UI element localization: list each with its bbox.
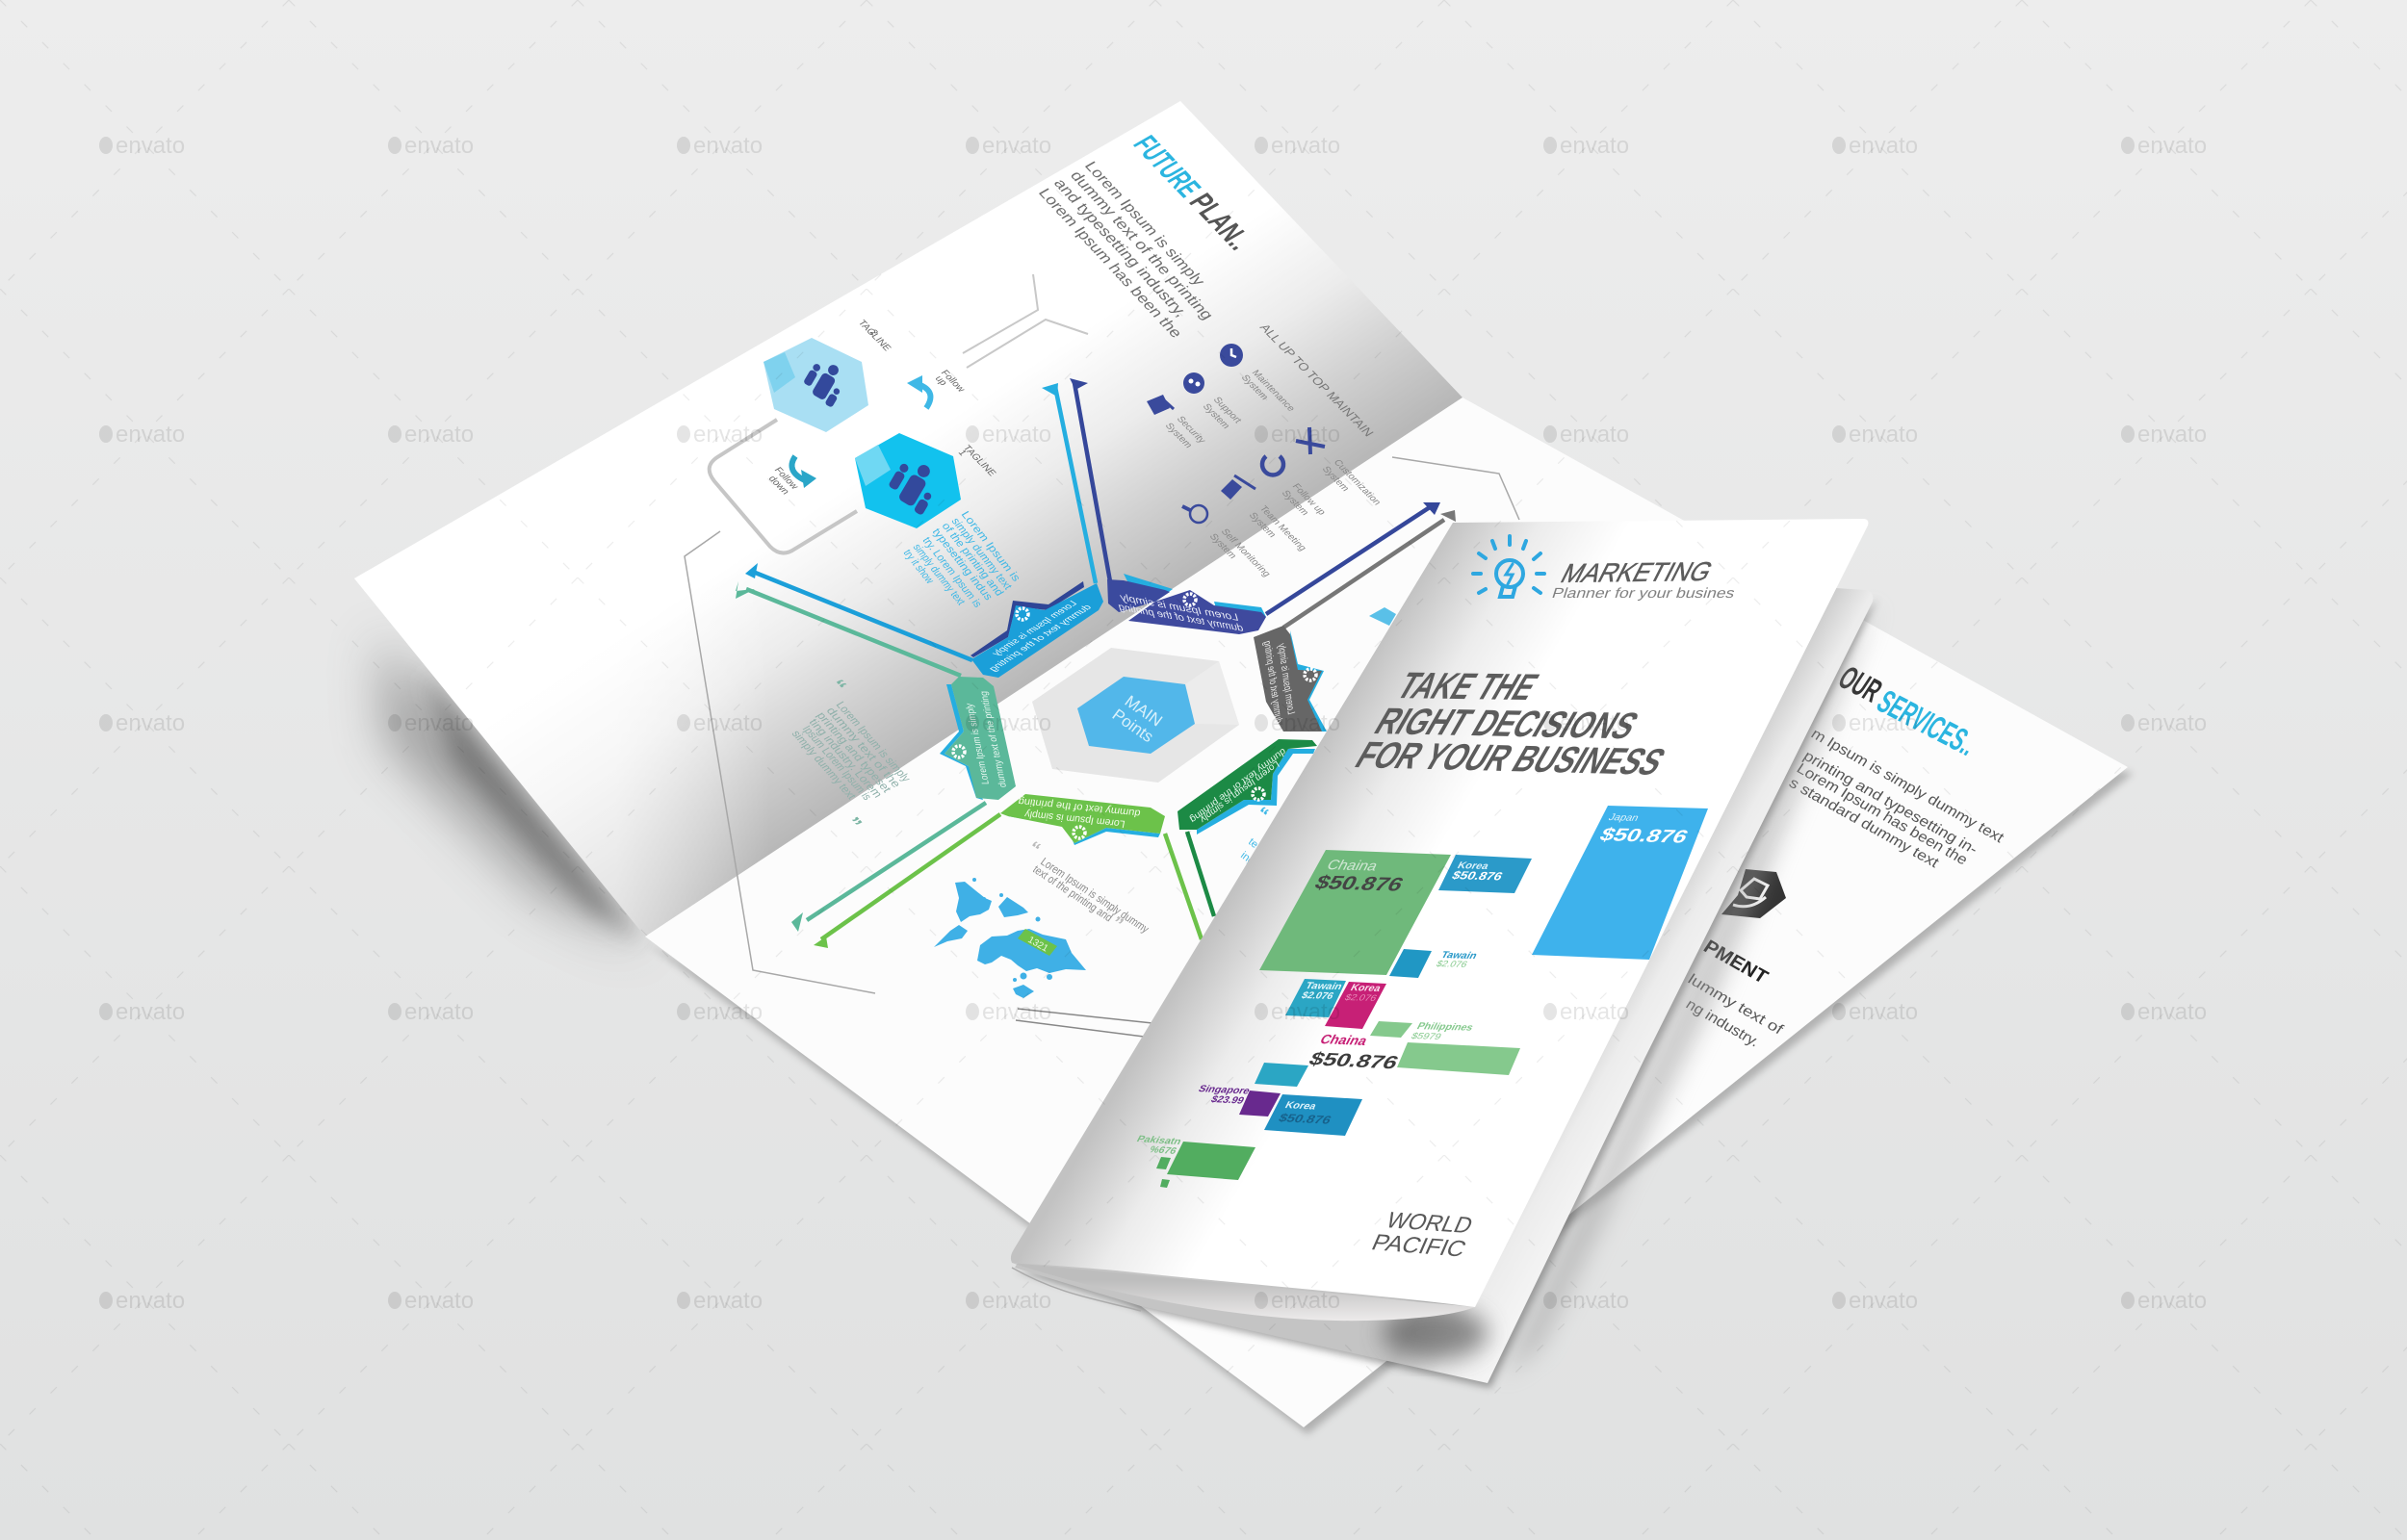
watermarks xyxy=(116,133,2207,1314)
block: korea blue: $50.876 xyxy=(1277,1111,1333,1126)
text block: teal quote: dummy text of the xyxy=(823,705,904,790)
text block: future plan intro xyxy=(1035,159,1216,341)
icon labels: System xyxy=(1200,402,1231,430)
icon: power xyxy=(1262,456,1283,475)
watermarks: envato xyxy=(693,422,763,448)
tagline labels: Follow xyxy=(938,369,968,395)
block: philippines: Philippines xyxy=(1415,1021,1475,1033)
title: our services xyxy=(1832,659,1983,762)
text block: map quote xyxy=(1023,837,1152,936)
tagline labels: down xyxy=(765,475,791,497)
watermarks: envato xyxy=(404,133,474,159)
icon labels: System xyxy=(1319,465,1351,493)
tab text xyxy=(1261,639,1297,725)
block: tawain xyxy=(1285,979,1346,1017)
small blue shape near cover xyxy=(1369,607,1396,626)
hexagon label: MAIN xyxy=(1122,692,1166,730)
icon: follow down arrow xyxy=(791,456,816,488)
block: chaina: $50.876 xyxy=(1311,871,1408,895)
icon labels: Maintenance xyxy=(1249,369,1297,414)
icon: support xyxy=(1183,372,1204,394)
arrow: cyan left xyxy=(745,563,972,660)
tab text: dummy text of the printing xyxy=(1261,639,1284,725)
brand name xyxy=(1550,556,1737,602)
block: korea pink: $2.076 xyxy=(1343,993,1379,1004)
tab text: Lorem Ipsum is simply xyxy=(990,600,1080,658)
upper panel xyxy=(354,101,1462,937)
block: philippines xyxy=(1370,1021,1475,1042)
watermarks: envato xyxy=(1271,999,1340,1025)
watermarks: envato xyxy=(982,1288,1051,1314)
block: japan: $50.876 xyxy=(1596,825,1692,847)
text block: map quote: text of the printing and xyxy=(1030,862,1115,924)
icon labels: Support xyxy=(1210,396,1244,425)
watermarks: envato xyxy=(1271,422,1340,448)
icon labels: System xyxy=(1279,489,1310,517)
map label xyxy=(1018,929,1057,956)
block: korea blue: Korea xyxy=(1283,1100,1319,1112)
watermarks: envato xyxy=(116,422,185,448)
watermarks: envato xyxy=(404,999,474,1025)
text block: blue paragraph: simply dummy text xyxy=(948,517,1014,592)
follow down box xyxy=(710,420,857,553)
watermarks: envato xyxy=(982,133,1051,159)
line: green right xyxy=(1165,834,1202,939)
icon labels: Customization xyxy=(1331,458,1383,507)
headline: FOR YOUR BUSINESS xyxy=(1348,734,1672,783)
fragment: blue quote behind cover: “ xyxy=(1252,803,1272,826)
text block: blue paragraph: try it show xyxy=(900,549,936,586)
center hexagon xyxy=(1032,648,1239,783)
block: chaina wide xyxy=(1306,1032,1520,1075)
block: tawain: $2.076 xyxy=(1300,990,1335,1002)
watermarks: envato xyxy=(1849,1288,1918,1314)
watermarks: envato xyxy=(116,1288,185,1314)
watermarks: envato xyxy=(404,710,474,736)
watermarks: envato xyxy=(1271,710,1340,736)
fragment: blue quote behind cover xyxy=(1238,803,1272,867)
footer: world pacific xyxy=(1368,1208,1477,1262)
arrow: navy right xyxy=(1266,502,1440,614)
block: korea pink: Korea xyxy=(1349,983,1384,994)
text block: teal quote xyxy=(789,676,914,834)
text block: future plan intro: dummy text of the printing xyxy=(1067,168,1216,322)
brand name: MARKETING xyxy=(1556,556,1719,588)
text block: services intro: printing and typesetting in- xyxy=(1800,748,1980,858)
tagline labels: Follow xyxy=(771,466,801,492)
icon: badge xyxy=(1184,594,1196,605)
icon: badge xyxy=(953,746,965,757)
watermarks: envato xyxy=(1560,1288,1629,1314)
headline xyxy=(1348,665,1672,783)
fragment: blue quote behind cover: te xyxy=(1246,836,1260,851)
block: chaina: Chaina xyxy=(1324,858,1381,874)
block: tawain small: Tawain xyxy=(1439,950,1479,962)
watermarks: envato xyxy=(2137,999,2207,1025)
watermark drops xyxy=(99,137,2135,1309)
world map xyxy=(934,878,1086,998)
tab: gray xyxy=(1254,626,1327,732)
icon: clock xyxy=(1220,344,1243,367)
icon labels: Team Meeting xyxy=(1256,504,1308,552)
icon: badge xyxy=(1253,788,1264,800)
block: japan: Japan xyxy=(1607,812,1641,824)
watermarks: envato xyxy=(2137,133,2207,159)
watermarks: envato xyxy=(982,999,1051,1025)
watermarks: envato xyxy=(1560,999,1629,1025)
title: our services: OUR xyxy=(1832,659,1888,709)
tab text: dummy text of the printing xyxy=(1117,602,1245,634)
text block: services intro: s standard dummy text xyxy=(1786,775,1942,871)
icon labels: System xyxy=(1206,532,1238,560)
text block: future plan intro: Lorem Ipsum is simply xyxy=(1081,159,1207,289)
footer: world pacific: PACIFIC xyxy=(1368,1230,1470,1262)
block: korea: Korea xyxy=(1456,860,1491,872)
text block: map quote: Lorem Ipsum is simply dummy xyxy=(1038,855,1152,936)
quote mark: “ xyxy=(1023,837,1045,860)
panel: folded inner flap xyxy=(1015,539,1873,1383)
icon labels: Security xyxy=(1174,415,1207,445)
hexagon label: Points xyxy=(1109,706,1157,746)
text block: future plan intro: Lorem Ipsum has been the xyxy=(1035,186,1185,341)
text block: teal quote: printing and typeset xyxy=(814,709,894,795)
tab text: Lorem Ipsum is simply xyxy=(1276,642,1297,716)
hexagon: tagline 2 xyxy=(764,338,868,432)
text block: services intro: m Ipsum is simply dummy text xyxy=(1808,726,2007,846)
text block: development xyxy=(1683,971,1787,1050)
tab text: Lorem Ipsum is simply xyxy=(965,703,992,784)
tab text: dummy text of the printing xyxy=(979,691,1009,787)
footer: world pacific: WORLD xyxy=(1383,1208,1477,1239)
icon: badge xyxy=(1305,669,1316,680)
headline: TAKE THE xyxy=(1389,665,1545,708)
icon: badge xyxy=(1017,608,1028,620)
title: future plan: FUTURE xyxy=(1126,131,1208,202)
watermarks: envato xyxy=(1560,422,1629,448)
watermarks: envato xyxy=(2137,710,2207,736)
title: our services: SERVICES.. xyxy=(1871,683,1983,762)
watermarks: envato xyxy=(1560,133,1629,159)
text block: blue paragraph: typesetting indus xyxy=(929,527,995,603)
block: pakistan xyxy=(1135,1135,1255,1188)
block: tawain small: $2.076 xyxy=(1435,960,1469,970)
text block: development: ng industry. xyxy=(1683,996,1762,1050)
arrow: navy top xyxy=(1070,378,1110,581)
block: philippines: $5979 xyxy=(1410,1032,1443,1042)
watermarks: envato xyxy=(1849,999,1918,1025)
tab text: dummy text of the printing xyxy=(987,603,1095,673)
text block: teal quote: Ipsum Lorem Ipsum is xyxy=(799,723,875,803)
block: korea xyxy=(1438,855,1532,893)
block: singapore: Singapore xyxy=(1197,1084,1252,1096)
wide shadow under left panel xyxy=(380,635,643,948)
hexagon: tagline 1 xyxy=(855,433,961,528)
watermarks: envato xyxy=(116,999,185,1025)
watermarks: envato xyxy=(404,422,474,448)
block: japan xyxy=(1532,806,1708,960)
watermarks: envato xyxy=(116,133,185,159)
quote mark: “ xyxy=(824,676,852,696)
shadow under cover lip xyxy=(1382,1306,1488,1360)
text block: teal quote: Lorem Ipsum is simply xyxy=(833,699,914,784)
thin hexagon frame lines xyxy=(685,274,1519,1037)
block: tawain: Tawain xyxy=(1304,981,1344,992)
text block: services intro: Lorem Ipsum has been the xyxy=(1794,760,1971,868)
tagline labels: 2 xyxy=(867,328,880,338)
heading: all up to top maintain: ALL UP TO TOP MAINTAIN xyxy=(1256,321,1377,439)
watermarks: envato xyxy=(693,710,763,736)
block: korea: $50.876 xyxy=(1450,868,1505,883)
cover lip layers xyxy=(1012,1263,1475,1321)
text block: future plan intro: and typesetting industry, xyxy=(1050,176,1190,320)
watermarks: envato xyxy=(1271,1288,1340,1314)
watermarks: envato xyxy=(693,1288,763,1314)
block: pakistan: Pakisatn xyxy=(1135,1135,1183,1147)
watermarks: envato xyxy=(693,999,763,1025)
tab text xyxy=(965,691,1009,787)
block: singapore xyxy=(1197,1084,1281,1116)
icon: follow up arrow xyxy=(907,375,930,408)
quote mark: ” xyxy=(1106,912,1127,936)
services shadow beside flap xyxy=(1502,602,1877,1376)
tab text: dummy text of the printing xyxy=(1188,746,1287,825)
block: chaina wide: $50.876 xyxy=(1306,1049,1402,1073)
block: chaina wide: Chaina xyxy=(1317,1032,1370,1048)
block: tawain small xyxy=(1389,949,1479,978)
icon: family xyxy=(884,454,945,516)
tagline labels: up xyxy=(932,374,949,388)
tab text: Lorem Ipsum is simply xyxy=(1198,758,1281,825)
tab: dark green xyxy=(1178,739,1317,834)
watermarks: envato xyxy=(982,422,1051,448)
tagline labels: TAGLINE xyxy=(960,444,998,478)
tight shadow under left panel xyxy=(424,669,643,941)
arrow: green lower left xyxy=(814,814,1000,948)
arrow: cyan top xyxy=(1042,383,1096,583)
text block: development: lummy text of xyxy=(1685,971,1787,1039)
watermarks: envato xyxy=(404,1288,474,1314)
text block: teal quote: simply dummy text xyxy=(789,728,860,802)
shadow under open sheet xyxy=(647,732,2134,1434)
icon: search xyxy=(1182,505,1207,523)
tab: teal xyxy=(940,677,1016,800)
block: pakistan: %676 xyxy=(1148,1145,1178,1157)
headline: RIGHT DECISIONS xyxy=(1367,701,1645,747)
text block: blue paragraph xyxy=(900,510,1022,609)
watermarks: envato xyxy=(1271,133,1340,159)
icon: badge xyxy=(1074,827,1085,838)
block: korea pink xyxy=(1325,982,1386,1029)
text block: teal quote: ting industry. Lorem xyxy=(806,716,885,800)
chart: country blocks xyxy=(1135,806,1708,1188)
block: korea blue xyxy=(1264,1094,1362,1136)
map label: 1321 xyxy=(1025,935,1050,955)
tab text: dummy text of the printing xyxy=(1017,795,1142,819)
panel: brochure cover xyxy=(1011,519,1868,1307)
text block: blue paragraph: simply dummy text xyxy=(910,543,968,607)
watermarks: envato xyxy=(1849,710,1918,736)
connector lines with arrow tips xyxy=(736,378,1456,948)
watermarks: envato xyxy=(2137,422,2207,448)
tagline labels xyxy=(765,319,998,497)
icon labels: System xyxy=(1246,511,1278,539)
icon: tools xyxy=(1296,427,1325,454)
icon: security xyxy=(1147,395,1174,415)
block: singapore: $23.99 xyxy=(1209,1094,1246,1106)
watermarks: envato xyxy=(2137,1288,2207,1314)
icon labels: Self Monitoring xyxy=(1218,527,1273,578)
text block: services intro xyxy=(1786,726,2007,871)
text block: blue paragraph: of the printing and xyxy=(939,522,1005,598)
icon: team xyxy=(1221,475,1255,500)
tagline labels: 1 xyxy=(955,449,969,458)
icon grid with labels xyxy=(1147,344,1383,578)
tab text: Lorem Ipsum is simply xyxy=(1118,592,1240,624)
watermarks: envato xyxy=(116,710,185,736)
hexagon label xyxy=(1109,692,1166,746)
text block: blue paragraph: try. Lorem Ipsum is xyxy=(919,536,984,609)
arrow: teal lower left xyxy=(791,803,986,932)
arrow: teal upper left xyxy=(736,581,961,676)
watermarks: envato xyxy=(982,710,1051,736)
line: dark green right xyxy=(1187,832,1214,916)
icon: family xyxy=(799,355,851,408)
icon labels xyxy=(1162,369,1383,578)
title: future plan: PLAN.. xyxy=(1182,189,1259,255)
watermarks: envato xyxy=(1849,422,1918,448)
fragment: blue quote behind cover: ing xyxy=(1238,850,1256,867)
tab text xyxy=(1017,795,1142,830)
icon labels: System xyxy=(1238,373,1270,401)
panel: open brochure sheet xyxy=(354,101,2128,1427)
logo: light bulb xyxy=(1473,536,1544,597)
folded flap shadow xyxy=(1015,599,1877,1388)
tab text: Lorem Ipsum is simply xyxy=(1023,808,1126,830)
lower panel xyxy=(645,398,2128,1427)
text block: blue paragraph: Lorem Ipsum is xyxy=(958,510,1022,583)
tagline labels: TAGLINE xyxy=(855,319,893,353)
brand name: Planner for your busines xyxy=(1550,586,1737,602)
tab: green xyxy=(1000,794,1165,845)
block: chaina xyxy=(1259,850,1451,975)
block: teal xyxy=(1255,1063,1308,1087)
tab: cyan xyxy=(971,581,1103,678)
icon labels: System xyxy=(1162,422,1194,449)
tab text xyxy=(1117,592,1245,634)
quote mark: ” xyxy=(840,813,867,834)
icon: house on hand xyxy=(1721,869,1786,918)
watermarks: envato xyxy=(1849,133,1918,159)
heading: development: PMENT xyxy=(1699,937,1772,988)
tab: navy xyxy=(1107,574,1266,634)
icon labels: Follow up xyxy=(1289,482,1328,517)
watermarks: envato xyxy=(1560,710,1629,736)
arrow: gray right xyxy=(1283,510,1456,628)
watermarks: envato xyxy=(693,133,763,159)
